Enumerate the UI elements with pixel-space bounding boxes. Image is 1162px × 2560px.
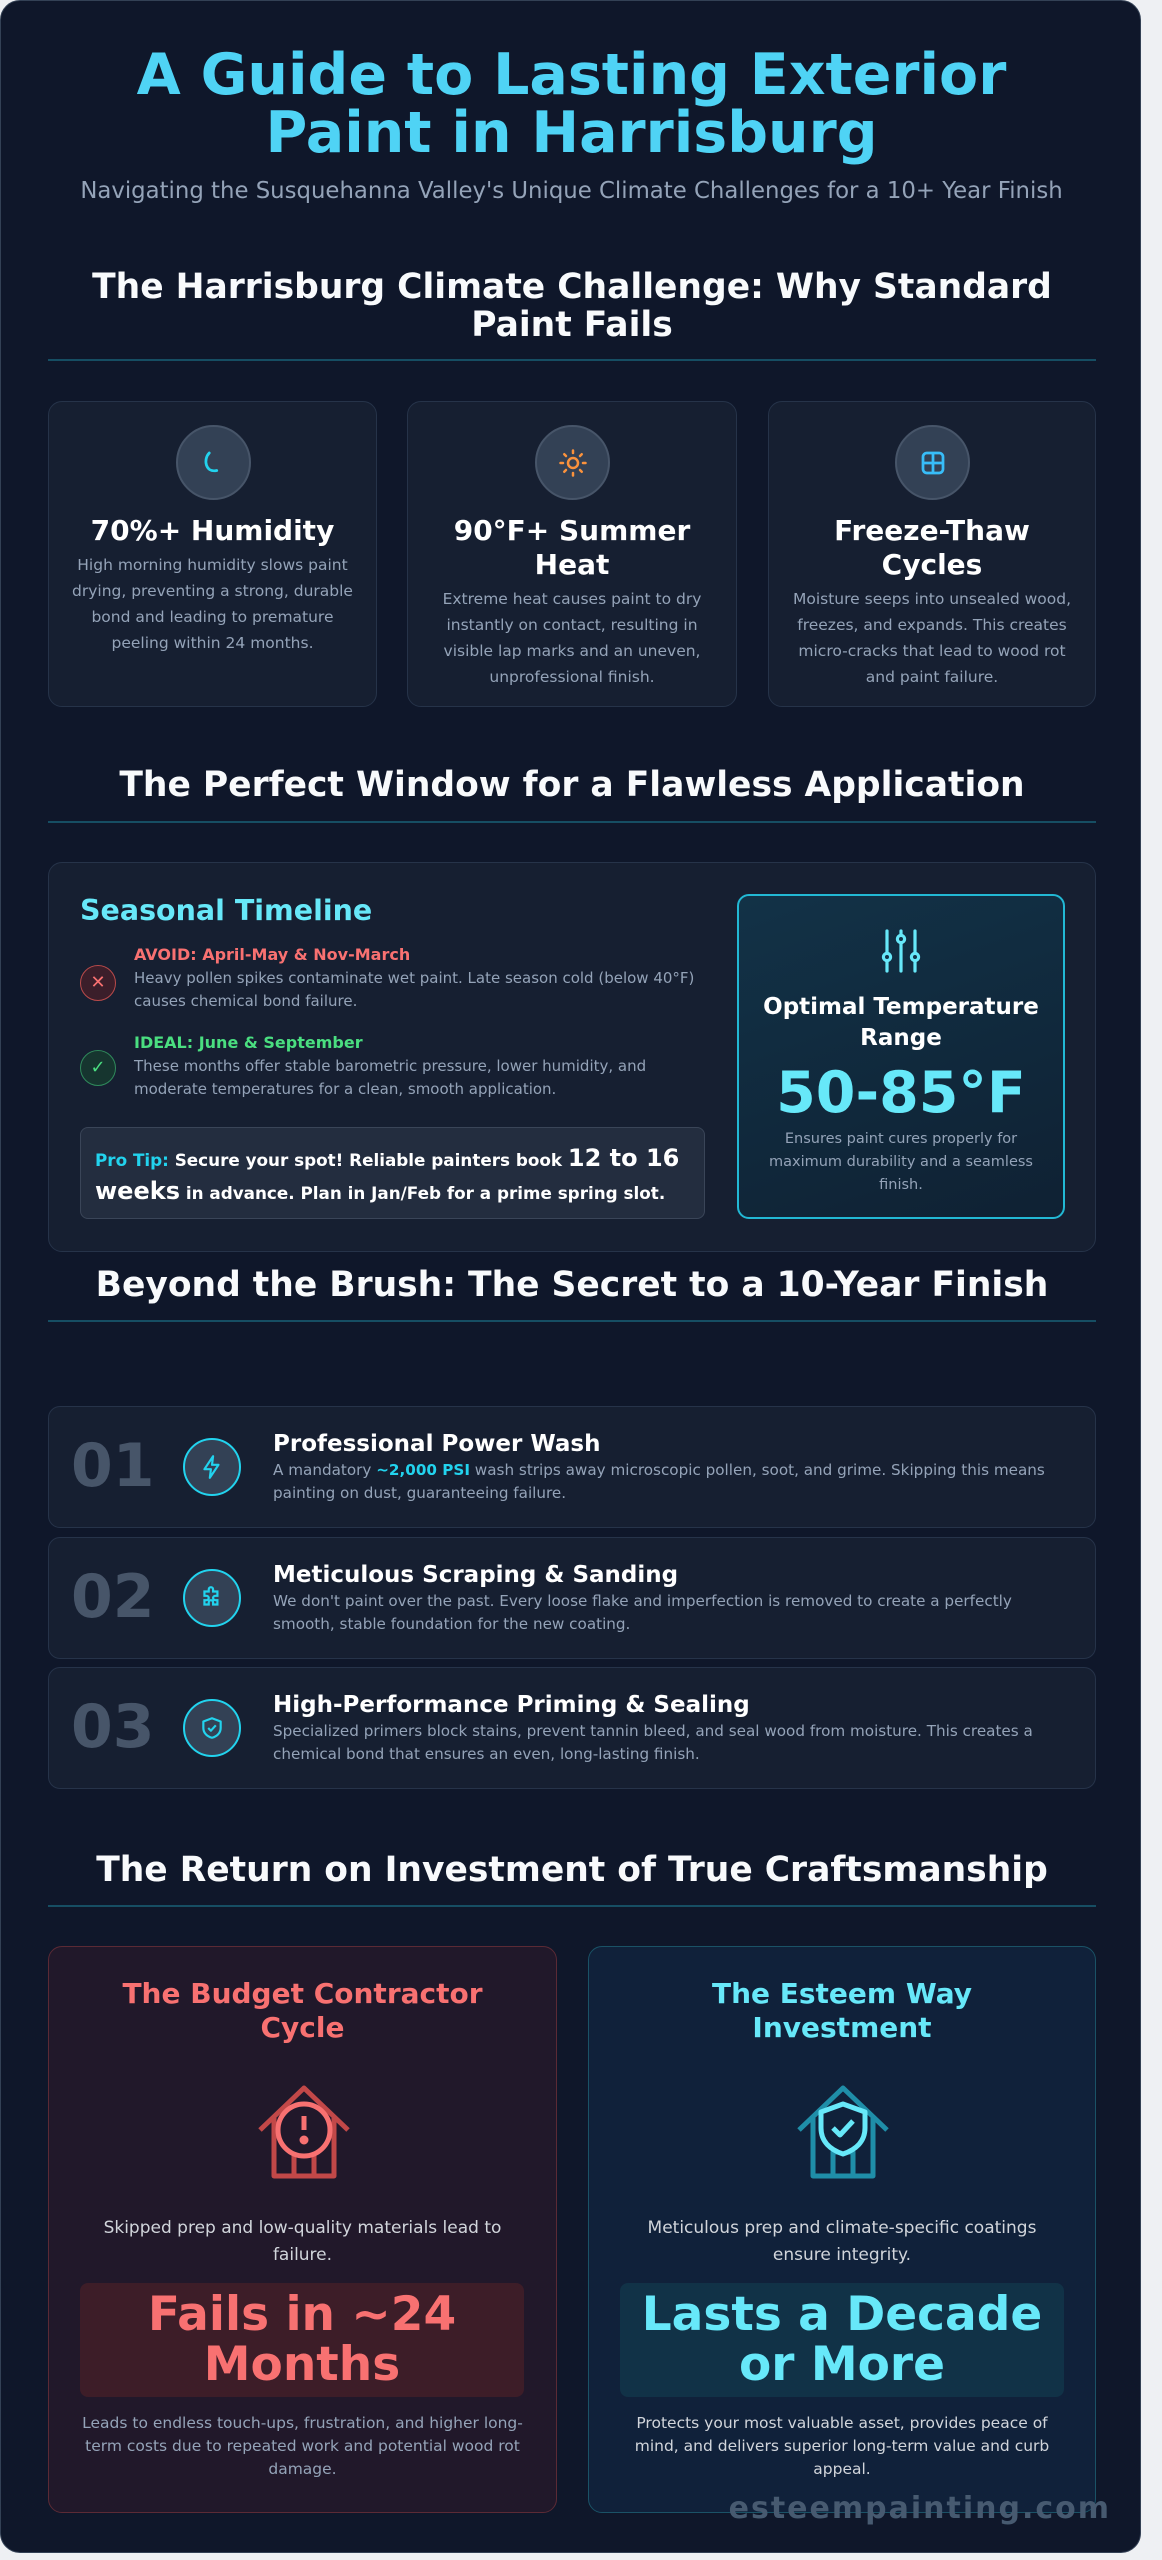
panel: budget contractor: Cycle (260, 2011, 344, 2044)
step 01: Professional Power Wash (273, 1431, 600, 1457)
heading: beyond the brush: Beyond the Brush: The Secret to a 10-Year Finish (96, 1265, 1048, 1305)
step 03: High-Performance Priming & Sealing (273, 1692, 750, 1718)
icon: x: ✕ (90, 972, 106, 993)
step 03 (48, 1667, 1096, 1789)
heading: climate challenge (92, 267, 1052, 345)
avoid item: Heavy pollen spikes contaminate wet paint. Late season cold (below 40°F) causes chemical bond failure. (134, 969, 694, 1010)
panel: esteem way: Meticulous prep and climate-specific coatings ensure integrity. (648, 2218, 1036, 2265)
panel: heat (407, 401, 737, 707)
icon: humidity (176, 425, 250, 500)
result: lasts: or More (739, 2337, 945, 2392)
icon: bolt (183, 1438, 241, 1496)
heading: perfect window: The Perfect Window for a Flawless Application (119, 765, 1025, 805)
icon: puzzle (183, 1569, 241, 1627)
icon: house shield (797, 2086, 889, 2178)
panel: budget contractor: The Budget Contractor (122, 1977, 483, 2010)
icon: ice (895, 425, 970, 500)
card title: 70%+ Humidity (91, 514, 334, 547)
card title: Heat (535, 548, 609, 581)
step 02: 02 (71, 1562, 154, 1632)
subtitle: Navigating the Susquehanna Valley's Unique Climate Challenges for a 10+ Year Finish (80, 178, 1063, 204)
temperature box: Optimal Temperature (763, 994, 1039, 1020)
result: lasts (620, 2283, 1064, 2397)
icon: check (80, 1050, 116, 1086)
ideal item: IDEAL: June & September (134, 1033, 363, 1052)
panel: esteem way: Protects your most valuable asset, provides peace of mind, and delivers superior long-term value and curb appeal. (635, 2414, 1049, 2478)
watermark: esteempainting.com (729, 2491, 1111, 2526)
icon: x (80, 965, 116, 1001)
icon: sliders (882, 929, 920, 973)
panel: budget contractor: Skipped prep and low-quality materials lead to failure. (104, 2218, 501, 2265)
card text: High morning humidity slows paint drying, preventing a strong, durable bond and leading to premature peeling within 24 months. (72, 556, 353, 652)
panel: humidity (48, 401, 377, 707)
card text: Extreme heat causes paint to dry instantly on contact, resulting in visible lap marks and an uneven, unprofessional finish. (443, 590, 701, 686)
temperature box: Range (860, 1025, 942, 1051)
pro tip: Pro Tip: Secure your spot! Reliable painters book 12 to 16 weeks in advance. Plan in Jan/Feb for a prime spring slot. (95, 1144, 679, 1205)
icon: house warning (258, 2086, 350, 2178)
temperature box: Ensures paint cures properly for maximum durability and a seamless finish. (769, 1131, 1033, 1193)
avoid item (80, 945, 694, 1010)
result: fails: Months (204, 2337, 400, 2392)
panel: freeze-thaw (768, 401, 1096, 707)
card title: Freeze-Thaw (834, 514, 1030, 547)
panel: esteem way (588, 1946, 1096, 2513)
title: Paint in Harrisburg (265, 100, 878, 166)
pro tip (80, 1127, 705, 1219)
ideal item: These months offer stable barometric pressure, lower humidity, and moderate temperatures for a clean, smooth application. (134, 1057, 646, 1098)
title (137, 42, 1006, 166)
result: lasts: Lasts a Decade (642, 2287, 1042, 2342)
result: fails: Fails in ~24 (148, 2287, 456, 2342)
step 01 (48, 1406, 1096, 1528)
step 02: Meticulous Scraping & Sanding (273, 1562, 678, 1588)
heading: climate challenge: Paint Fails (471, 305, 673, 345)
panel: esteem way: Investment (752, 2011, 932, 2044)
timeline heading: Seasonal Timeline (80, 894, 372, 927)
card text: Moisture seeps into unsealed wood, freezes, and expands. This creates micro-cracks that lead to wood rot and paint failure. (793, 590, 1071, 686)
panel: esteem way: The Esteem Way (712, 1977, 972, 2010)
step 01: A mandatory ~2,000 PSI wash strips away microscopic pollen, soot, and grime. Skipping this means painting on dust, guaranteeing failure. (273, 1461, 1045, 1502)
heading: ROI: The Return on Investment of True Craftsmanship (96, 1850, 1048, 1890)
card title (834, 514, 1030, 581)
avoid item: AVOID: April-May & Nov-March (134, 945, 410, 964)
card title: 90°F+ Summer (454, 514, 690, 547)
step 01: 01 (71, 1431, 154, 1501)
temperature box: 50-85°F (776, 1060, 1026, 1126)
panel: timeline (48, 862, 1096, 1252)
step 02: We don't paint over the past. Every loose flake and imperfection is removed to create a perfectly smooth, stable foundation for the new coating. (273, 1592, 1012, 1633)
card title (454, 514, 690, 581)
panel: budget contractor (48, 1946, 557, 2513)
step 03: Specialized primers block stains, prevent tannin bleed, and seal wood from moisture. This creates a chemical bond that ensures an even, long-lasting finish. (273, 1722, 1033, 1763)
panel: budget contractor: Leads to endless touch-ups, frustration, and higher long-term costs due to repeated work and potential wood rot damage. (82, 2414, 523, 2478)
result: fails (80, 2283, 524, 2397)
step 02 (48, 1537, 1096, 1659)
temperature box (737, 894, 1065, 1219)
card title: Cycles (882, 548, 982, 581)
ideal item (80, 1033, 646, 1098)
icon: shield (183, 1699, 241, 1757)
heading: climate challenge: The Harrisburg Climate Challenge: Why Standard (92, 267, 1052, 307)
icon: check: ✓ (90, 1057, 106, 1078)
title: A Guide to Lasting Exterior (137, 42, 1006, 108)
step 03: 03 (71, 1692, 154, 1762)
icon: sun (535, 425, 610, 500)
